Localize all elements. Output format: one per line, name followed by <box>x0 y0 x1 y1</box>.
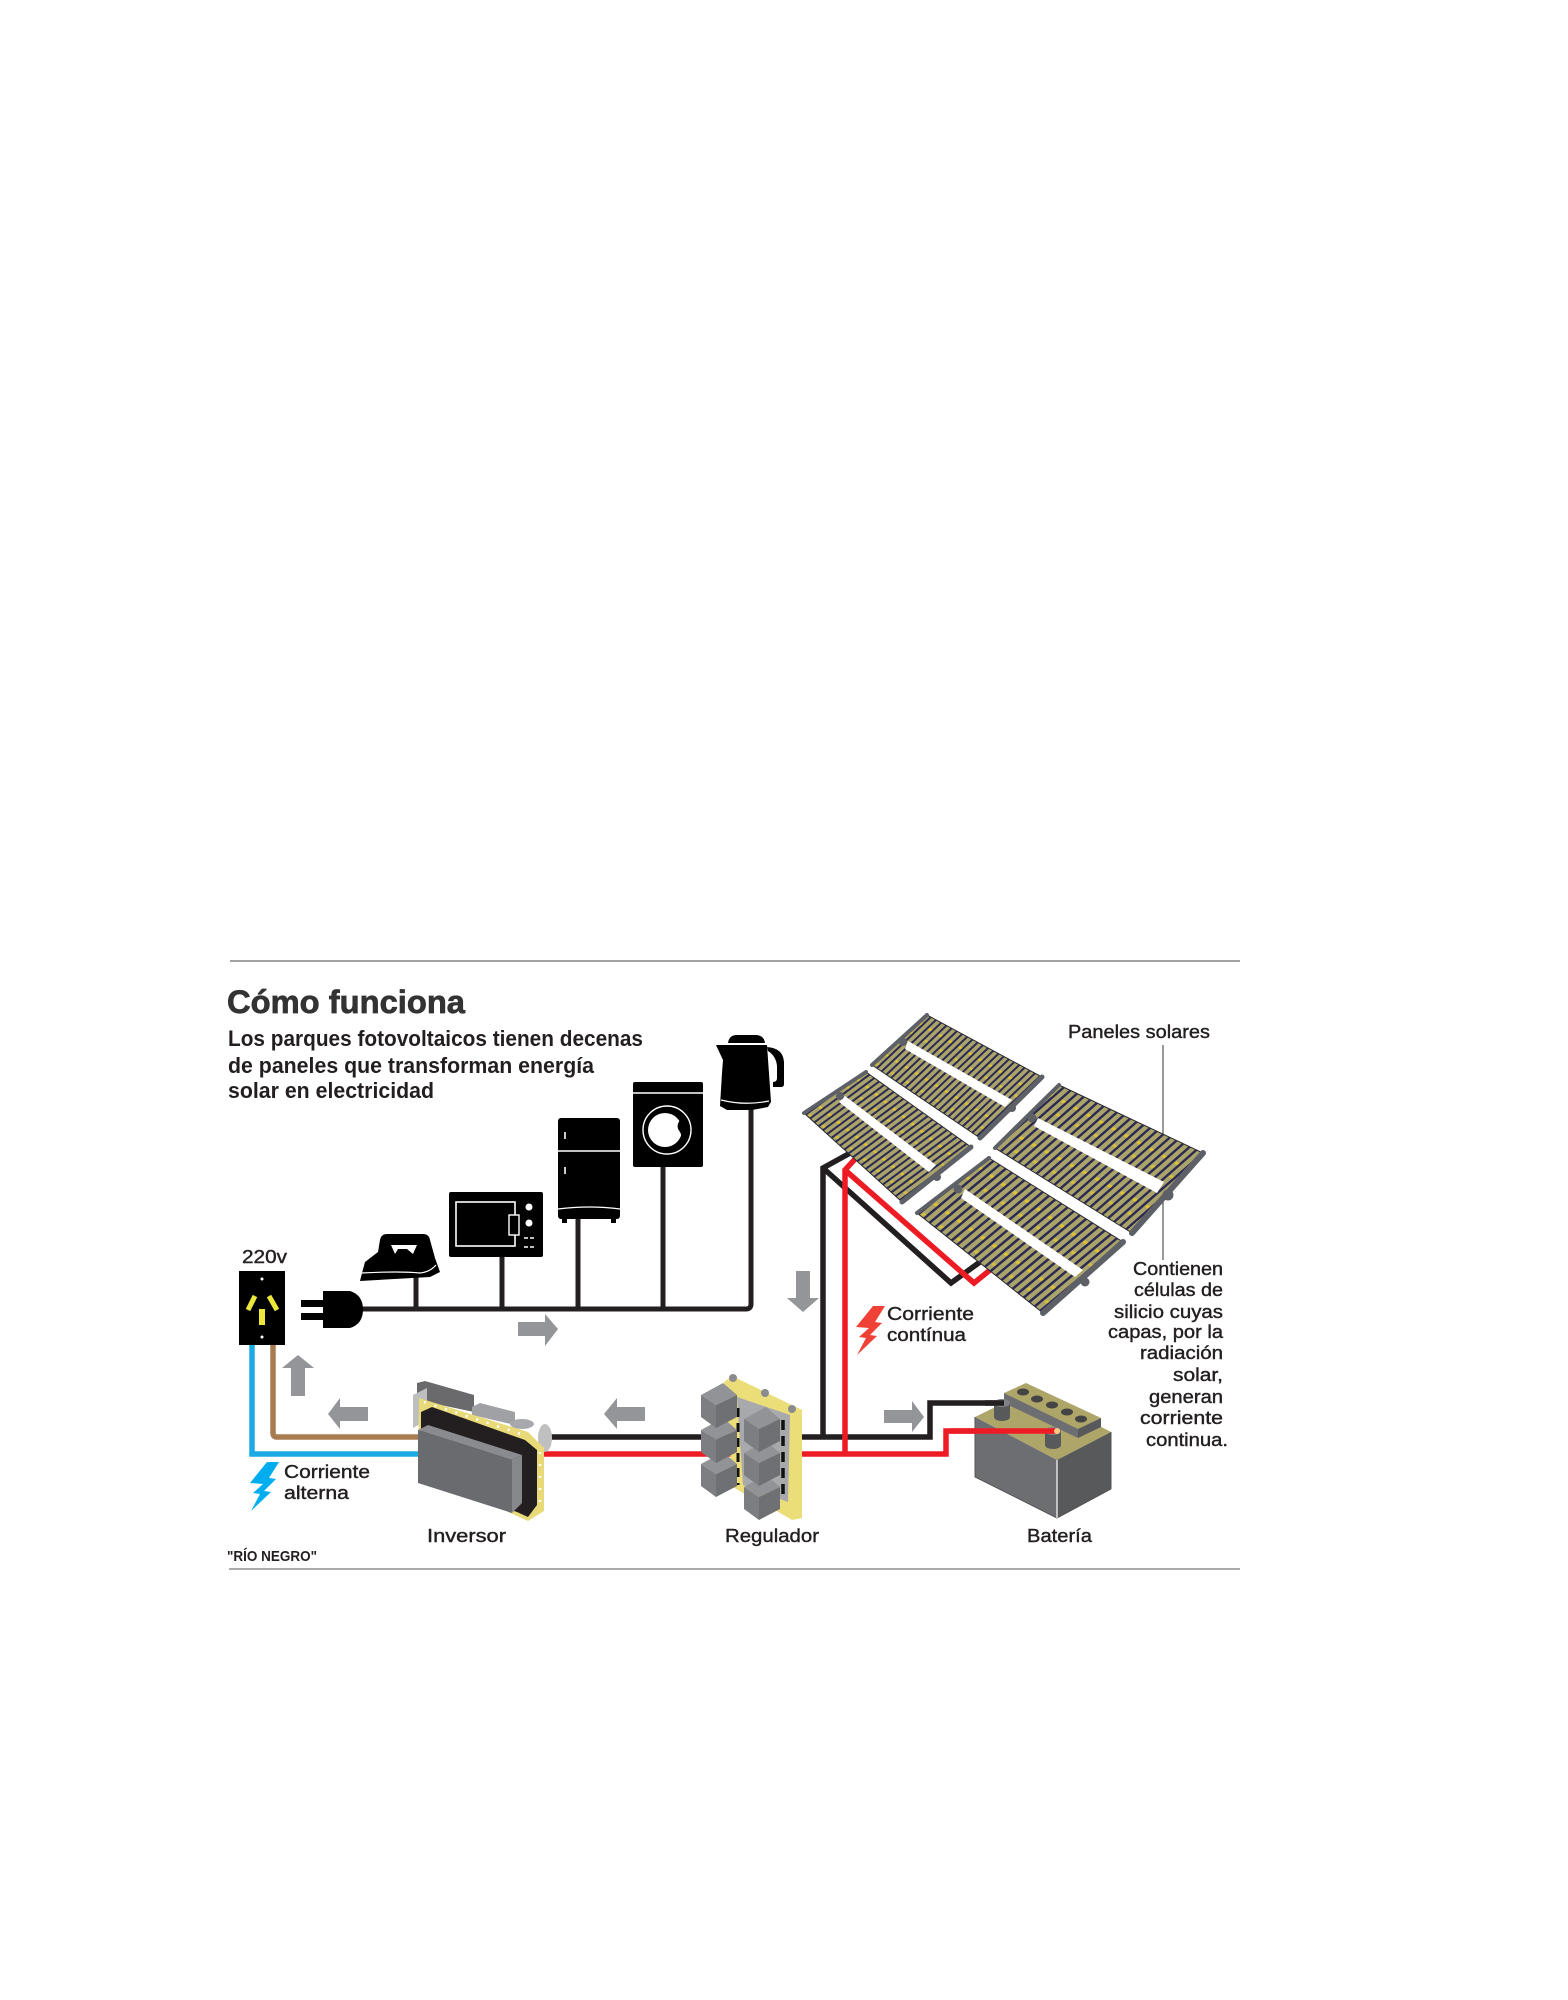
label: corriente continua: contínua <box>887 1325 967 1345</box>
solar panel back left <box>870 1012 1044 1140</box>
subtitle: solar en electricidad <box>228 1078 434 1103</box>
label: paneles solares: Paneles solares <box>1068 1022 1210 1042</box>
text block: panel description: radiación <box>1140 1343 1223 1363</box>
bottom rule <box>229 1568 1240 1570</box>
title: Cómo funciona <box>227 984 465 1020</box>
icon: kettle <box>716 1035 784 1110</box>
label: corriente continua: Corriente <box>887 1304 974 1324</box>
text block: panel description: Contienen <box>1133 1259 1223 1279</box>
label: inversor: Inversor <box>427 1526 506 1546</box>
text block: panel description: generan <box>1149 1387 1223 1407</box>
solar panel front left <box>802 1070 974 1204</box>
label: corriente alterna: Corriente <box>284 1462 370 1482</box>
label: corriente alterna: alterna <box>284 1483 350 1503</box>
label: bateria: Batería <box>1027 1526 1093 1546</box>
icon: red lightning <box>856 1306 885 1355</box>
top rule <box>230 960 1240 962</box>
leader line <box>1162 1045 1164 1260</box>
label: corriente continua <box>887 1304 974 1345</box>
arrow: down from panels <box>787 1271 819 1312</box>
text block: panel description: capas, por la <box>1108 1322 1224 1342</box>
inverter <box>413 1381 552 1521</box>
subtitle: Los parques fotovoltaicos tienen decenas <box>228 1026 643 1051</box>
text block: panel description <box>1108 1259 1228 1450</box>
text block: panel description: solar, <box>1173 1365 1223 1385</box>
arrow: left from inverter <box>328 1398 368 1429</box>
text block: panel description: silicio cuyas <box>1114 1302 1223 1322</box>
arrow: up to outlet <box>282 1355 314 1396</box>
wire: direct-current lines <box>535 1152 1057 1454</box>
icon: plug <box>301 1291 363 1328</box>
wire: neutral and live from inverter to outlet <box>252 1345 425 1454</box>
arrow: right to battery <box>884 1401 924 1432</box>
text block: panel description: continua. <box>1146 1430 1228 1450</box>
appliance power wiring <box>355 1105 751 1309</box>
label: corriente alterna <box>284 1462 370 1503</box>
icon: blue lightning <box>250 1462 279 1511</box>
solar panel front right <box>914 1156 1126 1316</box>
text block: panel description: corriente <box>1140 1408 1223 1428</box>
subtitle <box>228 1026 643 1103</box>
arrow: left from regulator <box>604 1398 645 1429</box>
source credit: "RÍO NEGRO" <box>227 1548 317 1565</box>
regulator <box>701 1374 802 1520</box>
label: 220v: 220v <box>242 1247 287 1267</box>
icon: microwave <box>449 1192 543 1257</box>
solar panel array <box>802 1012 1206 1316</box>
icon: wall outlet <box>239 1271 285 1345</box>
solar panel back right <box>992 1082 1206 1236</box>
arrow: right to appliances <box>518 1314 558 1346</box>
icon: washing machine <box>633 1082 703 1167</box>
label: regulador: Regulador <box>725 1526 819 1546</box>
subtitle: de paneles que transforman energía <box>228 1053 595 1078</box>
battery <box>950 1383 1111 1518</box>
text block: panel description: células de <box>1134 1280 1223 1300</box>
icon: fridge <box>558 1118 620 1223</box>
icon: iron <box>360 1234 440 1281</box>
